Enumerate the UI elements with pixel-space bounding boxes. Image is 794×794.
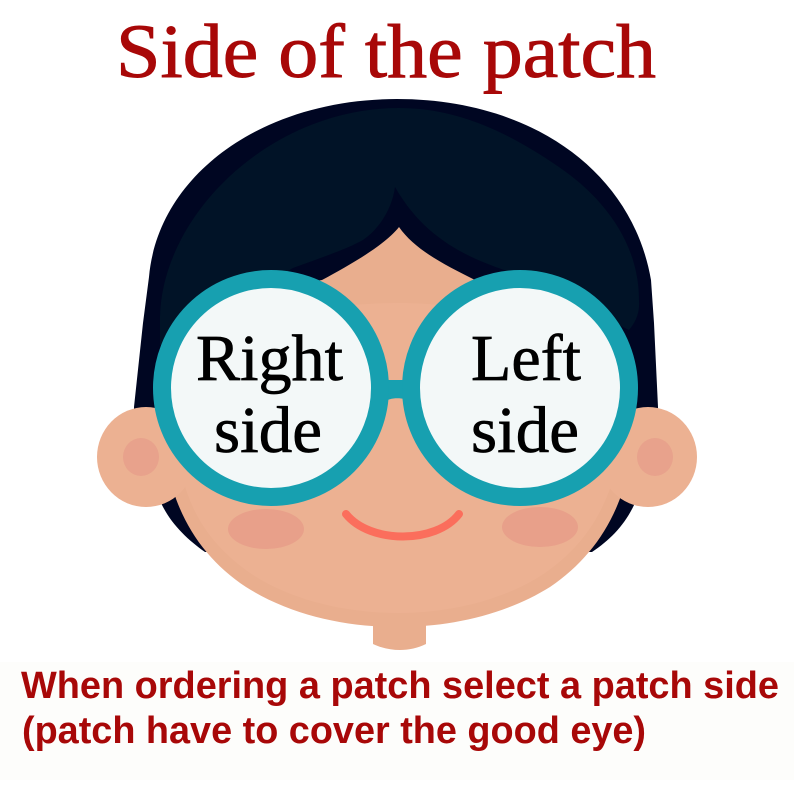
right ear (599, 407, 697, 507)
hair back (134, 99, 658, 552)
left ear (97, 407, 195, 507)
ordering instructions: When ordering a patch select a patch side (21, 665, 779, 707)
glasses bridge (384, 380, 410, 402)
right side lens (162, 279, 380, 497)
label: left side: Left (471, 322, 581, 395)
illustration: face with glasses (97, 99, 697, 650)
left cheek (228, 509, 304, 549)
ordering instructions: (patch have to cover the good eye) (22, 710, 646, 752)
hair highlight (160, 108, 639, 345)
title: Side of the patch (116, 10, 656, 94)
label: left side: side (471, 394, 579, 467)
left side lens (411, 279, 629, 497)
face highlight (176, 303, 620, 613)
label: right side: side (214, 394, 322, 467)
neck (373, 620, 426, 650)
caption background band (0, 662, 794, 780)
smile (346, 514, 459, 536)
face (166, 227, 630, 627)
label: right side: Right (196, 322, 343, 395)
right cheek (502, 507, 578, 547)
